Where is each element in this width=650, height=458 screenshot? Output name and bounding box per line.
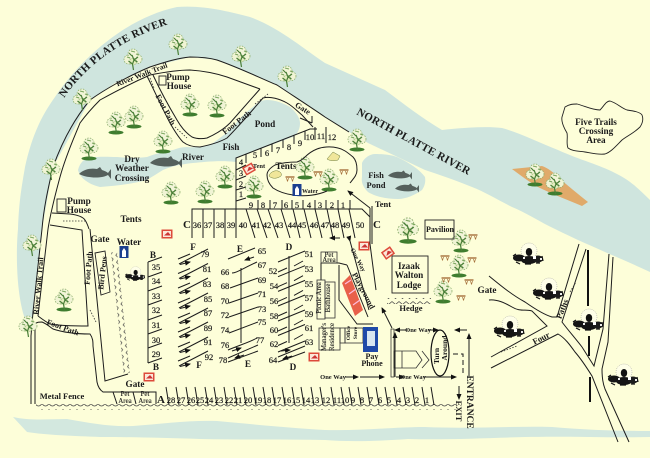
row C sites 36-50 and 1-9: 7 [273,200,277,210]
labels: trails and river: Tents [120,214,142,224]
pump house west [57,196,91,215]
row D sites 51-64 [269,242,313,372]
pump house west: Pump [67,196,91,206]
labels: trails and river: Pond [367,180,386,190]
pet areas by row A: Area [118,398,132,405]
site road with one way arrows: One Way [348,247,367,274]
row F sites 79-92: F [190,242,196,252]
row C sites 36-50 and 1-9: 2 [330,200,334,210]
row E sites 65-78: 78 [219,355,227,365]
pet area, picnic area and bathhouse block [316,252,373,324]
labels: trails and river: Tent [253,163,266,170]
row B sites 29-35: B [153,362,159,372]
playground: Playground [350,271,377,311]
manager's residence and office store: Office [346,325,352,340]
pay phone: Pay [366,352,378,361]
turn around and one way loop: One Way [405,327,432,334]
pet areas by row A: Pet [121,391,129,398]
footpath tracks [63,78,576,352]
pet area, picnic area and bathhouse block: Bathhouse [325,284,332,312]
row C sites 36-50 and 1-9: 41 [252,220,260,230]
row C sites 36-50 and 1-9: 1 [341,200,345,210]
row F sites 79-92: 92 [205,352,213,362]
row A sites 28-1: 23 [215,395,223,405]
dry weather crossing label: Dry [124,154,140,164]
row E sites 65-78: 72 [221,310,229,320]
row A sites 28-1 [157,387,434,406]
row D sites 51-64: D [286,242,293,252]
row A sites 28-1: 21 [234,395,242,405]
row B sites 29-35: 34 [152,276,161,286]
labels: trails and river: Gate [91,234,109,244]
izaak walton lodge: Izaak [398,261,421,271]
row D sites 51-64: 62 [270,339,278,349]
row C sites 36-50 and 1-9: 36 [193,220,201,230]
izaak walton lodge: Lodge [397,280,421,290]
row F sites 79-92 [178,242,213,370]
row D sites 51-64: 51 [305,249,313,259]
pet areas by row A: Pet [141,391,149,398]
turn around and one way loop [320,327,469,381]
row C sites 36-50 and 1-9: 49 [342,220,350,230]
hedge [387,298,431,313]
row F sites 79-92: 79 [201,249,209,259]
row C sites 36-50 and 1-9: C [183,219,191,231]
river: lower channel along the bottom [13,417,650,441]
tent loop campsites 1-12: 11 [317,131,325,141]
five trails crossing area: Area [586,135,606,145]
row E sites 65-78: 76 [221,340,229,350]
row A sites 28-1: 6 [378,395,382,405]
row F sites 79-92: 85 [204,294,212,304]
row A sites 28-1: 26 [187,395,195,405]
labels: trails and river: Water [302,189,318,195]
row C sites 36-50 and 1-9: 38 [216,220,224,230]
labels: trails and river: River Walk Trail [32,256,46,315]
row E sites 65-78: 73 [258,304,266,314]
pet area, picnic area and bathhouse block: Picnic Area [316,282,323,314]
pet area, picnic area and bathhouse block: Pet [325,252,333,259]
row B sites 29-35 [148,250,162,372]
manager's residence and office store [319,323,363,351]
row A sites 28-1: 15 [292,395,300,405]
row B sites 29-35: 30 [152,335,160,345]
row C sites 36-50 and 1-9 [183,200,381,238]
labels: trails and river: Foot Path [221,108,253,136]
row F sites 79-92: 91 [204,337,212,347]
row C sites 36-50 and 1-9: 4 [307,200,312,210]
row E sites 65-78: 71 [258,289,266,299]
row B sites 29-35: 32 [152,305,160,315]
tent loop campsites 1-12: 3 [239,168,243,178]
row E sites 65-78: E [245,359,251,369]
row D sites 51-64: 61 [305,323,313,333]
metal fence and hedge zigzag [36,252,456,410]
fish pond [362,154,425,199]
row D sites 51-64: 63 [305,337,313,347]
row B sites 29-35: 33 [152,291,160,301]
row B sites 29-35: B [150,250,156,260]
manager's residence and office store: Manager's [321,323,328,351]
turn around and one way loop: One Way [320,374,347,381]
pavilion: Pavilion [426,225,455,234]
row F sites 79-92: 83 [203,279,211,289]
row D sites 51-64: 55 [305,279,313,289]
row C sites 36-50 and 1-9: 45 [298,220,306,230]
row C sites 36-50 and 1-9: 50 [356,220,364,230]
pump house north [159,72,191,91]
water icons [120,184,302,258]
row A sites 28-1: 13 [311,395,319,405]
entrance and exit [454,375,474,429]
tent loop campsites 1-12: 8 [287,142,291,152]
picnic tables [286,170,478,300]
row C sites 36-50 and 1-9: 46 [310,220,318,230]
row A sites 28-1: 9 [351,395,355,405]
row A sites 28-1: 24 [205,395,214,405]
row D sites 51-64: 59 [305,309,313,319]
tent loop campsites 1-12: 2 [239,179,243,189]
tent loop campsites 1-12 [236,127,357,210]
island [512,166,588,206]
row B sites 29-35: 35 [152,262,160,272]
row F sites 79-92: 87 [204,308,212,318]
row A sites 28-1: 1 [425,395,429,405]
labels: trails and river: Paths [554,297,571,320]
row B sites 29-35: 31 [152,320,160,330]
row D sites 51-64: 54 [270,281,279,291]
row E sites 65-78 [219,244,266,369]
pet areas by row A [113,391,152,405]
row A sites 28-1: 12 [322,395,330,405]
row D sites 51-64: 57 [305,293,313,303]
labels: trails and river: Pond [255,119,275,129]
row C sites 36-50 and 1-9: 3 [318,200,322,210]
row E sites 65-78: 74 [221,325,230,335]
labels: trails and river: River Walk Trail [115,61,169,88]
entrance and exit: ENTRANCE [464,375,474,429]
labels: trails and river: Foot Path [154,93,178,127]
labels: trails and river: Fish [223,142,239,152]
tent loop campsites 1-12: 6 [265,148,269,158]
dry weather crossing label [115,154,150,183]
row E sites 65-78: 66 [221,267,229,277]
bird pens [95,251,110,295]
row E sites 65-78: 67 [258,260,266,270]
row A sites 28-1: 8 [360,395,364,405]
labels: trails and river: Fish [368,170,384,180]
tent loop campsites 1-12: 12 [328,132,336,142]
row A sites 28-1: 18 [263,395,271,405]
row A sites 28-1: 28 [167,395,175,405]
turn around and one way loop: Around [440,335,449,360]
tent loop campsites 1-12: 4 [239,157,244,167]
labels: trails and river: Gate [293,100,312,117]
dry weather crossing label: Crossing [115,173,150,183]
row D sites 51-64: 58 [270,311,278,321]
dry weather crossing label: Weather [115,163,149,173]
row A sites 28-1: 5 [387,395,391,405]
row A sites 28-1: 25 [196,395,204,405]
row E sites 65-78: 77 [256,335,264,345]
labels: trails and river: River [182,152,204,162]
row D sites 51-64: 60 [270,325,278,335]
labels: trails and river: Tents [275,161,297,171]
trees [19,34,564,337]
row C sites 36-50 and 1-9: 5 [295,200,299,210]
pump house north: House [167,81,191,91]
row A sites 28-1: 4 [397,395,402,405]
labels: trails and river: Tent [375,199,391,209]
labels: trails and river: Four [531,329,551,347]
row D sites 51-64: 53 [305,264,313,274]
row A sites 28-1: 11 [333,395,341,405]
camp icons [125,243,638,385]
pavilion [425,220,455,239]
row C sites 36-50 and 1-9: 42 [263,220,271,230]
hedge: Hedge [399,303,423,313]
bird pens: Bird Pens [96,256,109,290]
row A sites 28-1: 2 [415,395,419,405]
red tent icons [144,162,395,382]
row A sites 28-1: 22 [225,395,233,405]
row D sites 51-64: 56 [270,296,278,306]
turn around and one way loop: One Way [400,374,427,381]
thick black road segments [588,250,590,402]
row A sites 28-1: 3 [406,395,410,405]
river: North Platte River main channel [17,7,650,330]
row E sites 65-78: 75 [258,317,266,327]
row C sites 36-50 and 1-9: C [373,219,381,231]
pay phone [361,327,383,368]
row C sites 36-50 and 1-9: 39 [227,220,235,230]
row A sites 28-1: 14 [302,395,311,405]
row C sites 36-50 and 1-9: 44 [288,220,297,230]
pump house west: House [67,205,91,215]
row F sites 79-92: 81 [203,264,211,274]
manager's residence and office store: Store [353,326,359,339]
labels: trails and river: Foot Path [83,250,94,285]
pet areas by row A: Area [138,398,152,405]
river label: North Platte River (lower): NORTH PLATTE RIVER [355,106,473,178]
row B sites 29-35: 29 [152,349,160,359]
manager's residence and office store: Residence [329,323,336,351]
row D sites 51-64: D [290,362,297,372]
row A sites 28-1: A [157,394,165,406]
row E sites 65-78: 65 [258,246,266,256]
row D sites 51-64: 52 [269,266,277,276]
labels: trails and river: Metal Fence [40,391,85,401]
site road with one way arrows [330,191,392,328]
labels: trails and river [32,61,571,401]
tent loop campsites 1-12: 1 [239,189,243,199]
pond and dry weather crossing [78,100,300,187]
row C sites 36-50 and 1-9: 40 [239,220,247,230]
row E sites 65-78: E [237,244,243,254]
pay phone: Phone [361,359,383,368]
tent loop campsites 1-12: 5 [253,150,257,160]
row A sites 28-1: 17 [273,395,281,405]
row C sites 36-50 and 1-9: 37 [204,220,212,230]
river label: North Platte River (upper): NORTH PLATTE RIVER [58,18,168,98]
turn around and one way loop: Turn [432,347,441,364]
labels: trails and river: Gate [126,379,144,389]
tent loop campsites 1-12: 7 [276,145,280,155]
izaak walton lodge [392,256,428,293]
row C sites 36-50 and 1-9: 9 [249,200,253,210]
tent loop campsites 1-12: 9 [298,138,302,148]
row F sites 79-92: F [196,360,202,370]
pet area, picnic area and bathhouse block: Area [322,257,336,264]
row D sites 51-64: 64 [269,355,278,365]
trails and roads [31,57,629,442]
small tents [269,152,340,178]
row C sites 36-50 and 1-9: 8 [261,200,265,210]
row F sites 79-92: 89 [204,323,212,333]
five trails crossing area: Five Trails [575,117,617,127]
row A sites 28-1: 20 [244,395,252,405]
playground [342,265,377,317]
labels: trails and river: Water [117,237,141,247]
pump house north: Pump [166,72,190,82]
five trails crossing area [562,101,643,154]
row A sites 28-1: 19 [254,395,262,405]
fish icons [79,156,419,192]
entrance and exit: EXIT [454,401,464,422]
labels: trails and river: Gate [478,285,496,295]
row E sites 65-78: 68 [221,281,229,291]
row C sites 36-50 and 1-9: 43 [275,220,283,230]
row A sites 28-1: 16 [283,395,291,405]
five trails crossing area: Crossing [579,126,614,136]
labels: trails and river: Foot Path [46,318,81,338]
row C sites 36-50 and 1-9: 47 [321,220,329,230]
izaak walton lodge: Walton [395,270,423,280]
row C sites 36-50 and 1-9: 48 [331,220,339,230]
row A sites 28-1: 10 [341,395,349,405]
row E sites 65-78: 70 [221,296,229,306]
row A sites 28-1: 27 [177,395,185,405]
row E sites 65-78: 69 [258,275,266,285]
row C sites 36-50 and 1-9: 6 [284,200,288,210]
tent loop campsites 1-12: 10 [306,132,314,142]
row A sites 28-1: 7 [369,395,373,405]
